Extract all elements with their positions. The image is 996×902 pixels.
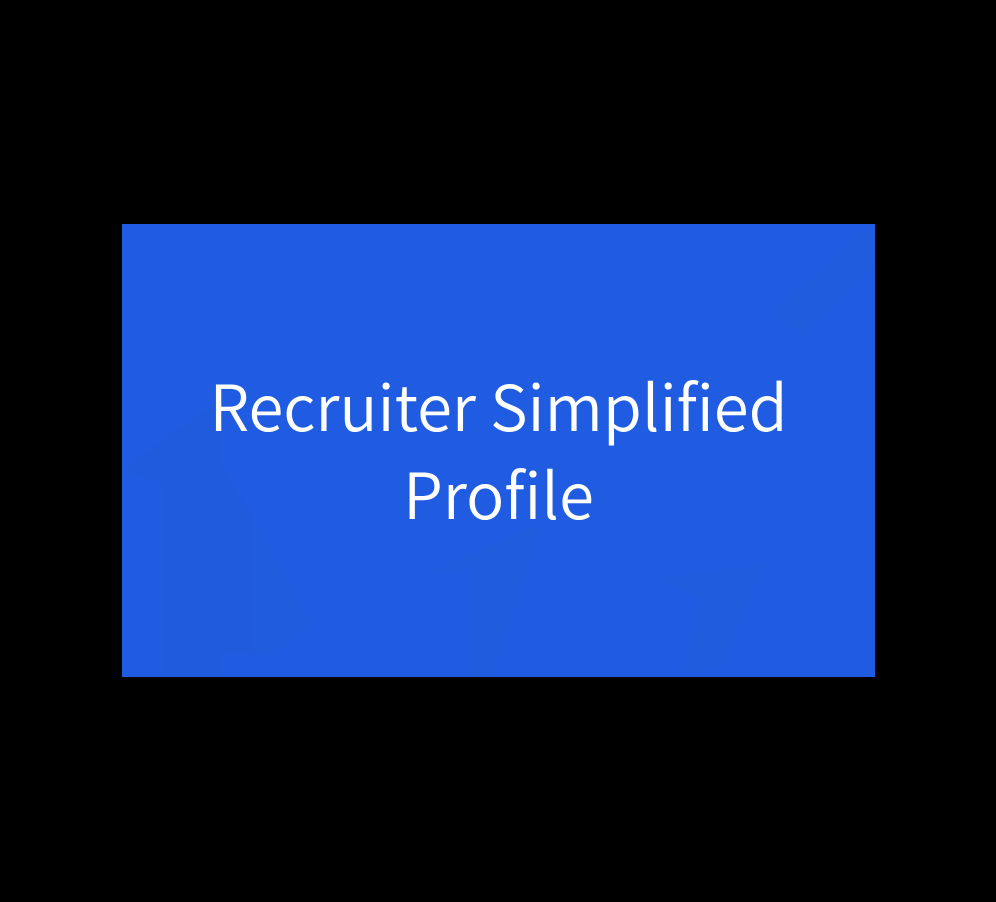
title <box>209 358 788 538</box>
title: Recruiter Simplified <box>209 358 788 450</box>
panel: title card <box>122 224 875 677</box>
title: Profile <box>403 446 594 538</box>
